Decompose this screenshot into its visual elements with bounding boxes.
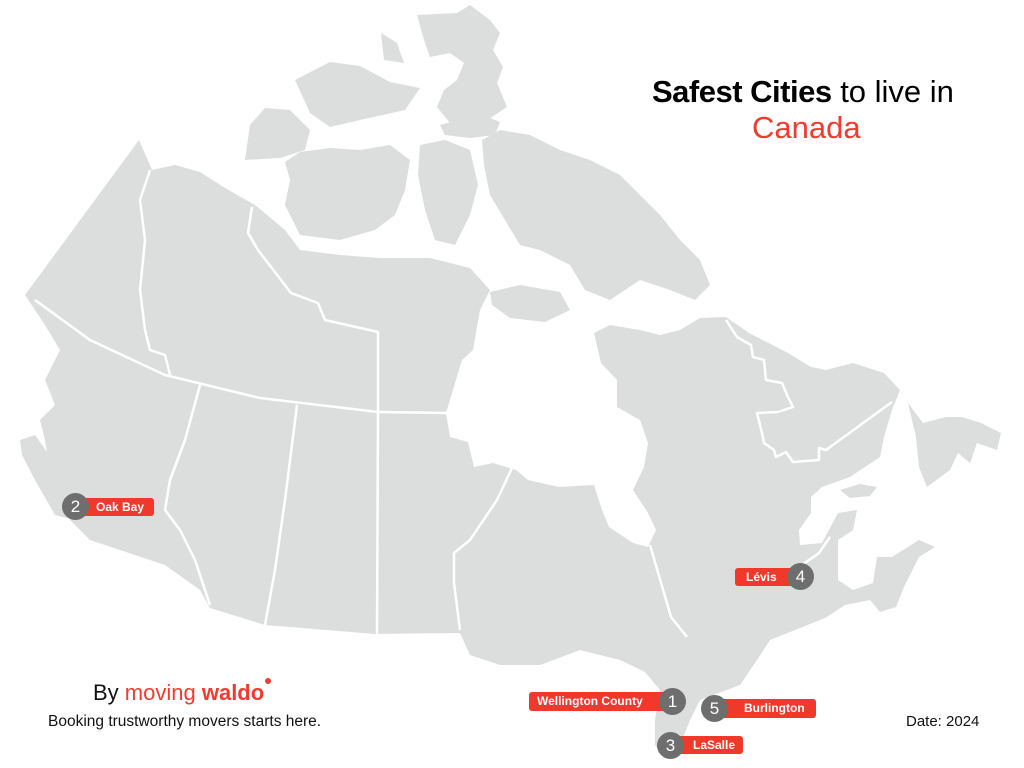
label: Burlington: [701, 695, 816, 722]
label: Oak Bay: Oak Bay: [96, 500, 144, 514]
label: Wellington County: 1: [668, 692, 677, 711]
island: Victoria: [285, 145, 410, 240]
tagline: Booking trustworthy movers starts here.: [48, 713, 321, 730]
island: Ellesmere: [417, 5, 507, 123]
label: Wellington County: Wellington County: [537, 694, 643, 708]
title: Canada: Canada: [752, 110, 861, 145]
island: Southampton: [490, 285, 570, 322]
label: Oak Bay: 2: [71, 497, 80, 516]
island: Baffin: [482, 130, 710, 300]
label: Lévis: 4: [796, 567, 805, 586]
island: Newfoundland: [908, 403, 1001, 487]
label: Burlington: 5: [710, 699, 719, 718]
label: Lévis: Lévis: [746, 570, 777, 584]
label: Lévis: [735, 563, 814, 590]
island: Prince of Wales: [418, 140, 478, 245]
island: Banks: [245, 108, 310, 160]
label: LaSalle: 3: [666, 736, 675, 755]
title: Safest Cities to live in: [652, 74, 954, 109]
date: Date: 2024: [906, 713, 979, 730]
label: LaSalle: LaSalle: [693, 738, 735, 752]
label: Oak Bay: [62, 493, 154, 520]
label: Wellington County: [529, 688, 686, 715]
brand: By moving waldo: [93, 680, 264, 705]
label: LaSalle: [657, 732, 743, 759]
mainland: [25, 140, 935, 758]
island: Devon: [440, 114, 500, 138]
island: Parry: [295, 62, 420, 127]
island: PEI: [840, 484, 877, 498]
label: Burlington: Burlington: [744, 701, 805, 715]
island: Vancouver: [20, 435, 80, 520]
